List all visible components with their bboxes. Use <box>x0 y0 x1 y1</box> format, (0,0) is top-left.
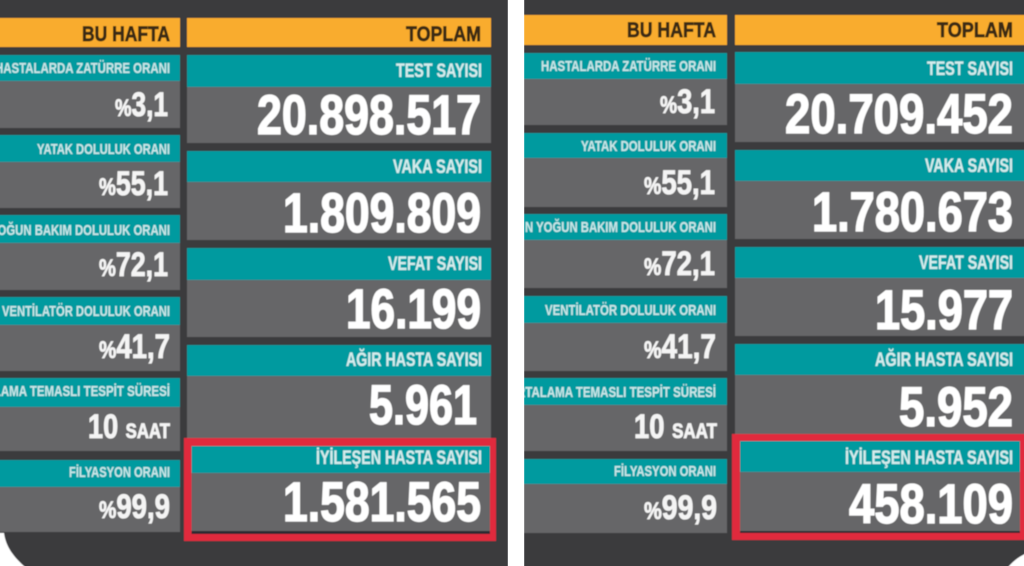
total cell: cases <box>735 150 1024 243</box>
weekly cell: bed occupancy: %55,1 <box>99 165 168 203</box>
weekly cell: ventilator occupancy <box>524 296 727 371</box>
weekly cell: ventilator occupancy: VENTİLATÖR DOLULUK ORANI <box>2 303 170 320</box>
total cell: cases: VAKA SAYISI <box>393 157 482 178</box>
weekly cell: filiation rate <box>0 460 180 532</box>
weekly cell: bed occupancy <box>0 135 180 208</box>
total cell: severe patients: AĞIR HASTA SAYISI <box>346 349 482 371</box>
weekly cell: bed occupancy <box>524 133 727 207</box>
weekly cell: ICU occupancy <box>0 215 180 290</box>
weekly cell: contact tracing time <box>0 378 180 451</box>
weekly cell: filiation rate: FİLYASYON ORANI <box>69 464 170 481</box>
header: BU HAFTA <box>524 15 727 45</box>
weekly cell: ventilator occupancy: %41,7 <box>99 328 170 366</box>
total cell: cases: 1.809.809 <box>283 181 481 244</box>
weekly cell: ventilator occupancy <box>0 297 180 371</box>
weekly cell: pneumonia rate <box>0 55 180 128</box>
weekly cell: contact tracing time: 10 SAAT <box>88 408 170 446</box>
total cell: tests <box>735 52 1024 145</box>
weekly cell: bed occupancy: %55,1 <box>644 164 715 202</box>
total cell: deaths <box>735 247 1024 341</box>
weekly cell: pneumonia rate: %3,1 <box>660 83 715 121</box>
weekly cell: pneumonia rate <box>524 53 727 125</box>
total cell: severe patients: 5.961 <box>369 373 477 436</box>
weekly cell: bed occupancy: YATAK DOLULUK ORANI <box>581 138 716 155</box>
total cell: deaths: VEFAT SAYISI <box>388 254 482 275</box>
highlighted total cell: recovered patients <box>184 438 496 541</box>
highlighted total cell: recovered patients: 1.581.565 <box>283 470 481 533</box>
weekly cell: ventilator occupancy: %41,7 <box>644 328 716 366</box>
weekly cell: pneumonia rate: %3,1 <box>115 86 168 124</box>
header: BU HAFTA <box>0 18 180 47</box>
header: TOPLAM: TOPLAM <box>406 23 481 46</box>
weekly cell: contact tracing time: ORTALAMA TEMASLI TESPİT SÜRESİ <box>508 384 716 401</box>
weekly cell: ventilator occupancy: VENTİLATÖR DOLULUK ORANI <box>545 302 716 319</box>
weekly cell: ICU occupancy: %72,1 <box>644 245 715 283</box>
header: TOPLAM <box>187 18 491 47</box>
weekly cell: ICU occupancy: %72,1 <box>99 246 168 284</box>
header: TOPLAM: TOPLAM <box>937 19 1013 42</box>
header: TOPLAM <box>735 15 1024 45</box>
panel: left table <box>0 0 508 566</box>
total cell: severe patients <box>187 345 491 438</box>
highlighted total cell: recovered patients <box>732 434 1024 540</box>
weekly cell: filiation rate: %99,9 <box>644 489 717 527</box>
header: BU HAFTA: BU HAFTA <box>627 19 716 42</box>
weekly cell: pneumonia rate: HASTALARDA ZATÜRRE ORANI <box>0 60 170 77</box>
total cell: severe patients <box>735 344 1024 438</box>
weekly cell: bed occupancy: YATAK DOLULUK ORANI <box>37 141 170 158</box>
total cell: tests <box>187 55 491 146</box>
total cell: tests: 20.898.517 <box>257 83 481 146</box>
weekly cell: contact tracing time: 10 SAAT <box>634 408 717 446</box>
total cell: cases <box>187 151 491 244</box>
highlighted total cell: recovered patients: İYİLEŞEN HASTA SAYISI <box>316 448 482 469</box>
weekly cell: ICU occupancy <box>524 214 727 288</box>
weekly cell: filiation rate: %99,9 <box>99 488 170 526</box>
total cell: deaths: 16.199 <box>346 277 481 340</box>
total cell: deaths <box>187 248 491 340</box>
weekly cell: pneumonia rate: HASTALARDA ZATÜRRE ORANI <box>541 58 716 75</box>
total cell: tests: TEST SAYISI <box>396 61 482 82</box>
header: BU HAFTA: BU HAFTA <box>82 23 170 46</box>
weekly cell: contact tracing time <box>508 378 727 451</box>
weekly cell: filiation rate: FİLYASYON ORANI <box>614 463 716 480</box>
weekly cell: ICU occupancy: N YOĞUN BAKIM DOLULUK ORANI <box>525 218 716 236</box>
panel: right table <box>508 0 1024 566</box>
weekly cell: filiation rate <box>524 459 727 533</box>
